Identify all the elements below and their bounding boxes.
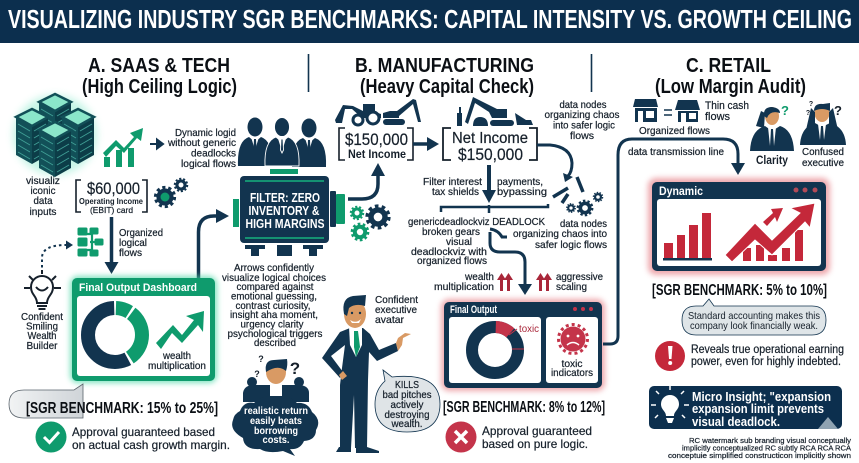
panel: dynamic dashboard	[648, 178, 830, 275]
text: arrows confidently: Arrows confidently	[234, 263, 315, 274]
label: organized flows: Organized flows	[639, 126, 710, 137]
card: net income left	[339, 128, 413, 161]
callout: kills bad pitches	[375, 370, 440, 432]
text: generic deadlock: deadlockviz with	[411, 247, 487, 258]
arrow: filter down to deadlock	[441, 165, 548, 213]
label: data inputs: inputs	[30, 207, 56, 218]
text: dynamic logic	[167, 128, 236, 170]
card: net income left: $150,000	[345, 130, 408, 149]
illustration: confused executive with cloud: ?	[258, 354, 264, 364]
panel: final output dashboard	[70, 276, 217, 383]
panel: filter machine	[233, 176, 345, 256]
panel: final output manufacturing: indicators	[551, 368, 593, 379]
text: organized logical flows: Organized	[119, 228, 163, 239]
illustration: confused executive with cloud: realistic return	[244, 406, 308, 417]
text: generic deadlock: genericdeadlockviz DEADLOCK	[408, 217, 545, 228]
icon: wealth arrow	[156, 311, 204, 349]
text: thin cash flows: flows	[705, 111, 730, 123]
text: filter interest: Filter interest	[423, 177, 482, 188]
callout: standard accounting	[682, 299, 826, 335]
label: wealth builder	[21, 312, 63, 352]
arrow: dotted idea path	[42, 240, 73, 273]
heading: section C	[655, 55, 806, 98]
card: operating income: Operating Income	[79, 196, 143, 206]
callout: standard accounting: Standard accounting makes this	[688, 311, 820, 322]
text: watermark note: conceptuie simplified constructicon implicitly shown	[668, 451, 851, 460]
panel: filter machine: INVENTORY &	[248, 203, 320, 218]
text: arrows confidently: emotional guessing,	[231, 292, 317, 302]
label: wealth multiplication	[148, 351, 206, 372]
title banner	[0, 0, 859, 43]
text: data nodes top: flows	[570, 131, 594, 142]
callout: kills bad pitches: actively	[390, 400, 424, 411]
chart: red bars	[663, 213, 712, 260]
panel: dynamic dashboard: Dynamic	[659, 184, 703, 198]
card: net income right: $150,000	[458, 145, 523, 164]
text: arrows confidently	[222, 263, 326, 349]
panel: final output manufacturing: toxic	[562, 359, 582, 370]
label: executive avatar: executive	[375, 305, 417, 316]
label: data inputs: data	[34, 196, 53, 207]
arrow: chart to text	[150, 140, 163, 148]
text: arrows confidently: visualize logical choices	[222, 273, 326, 284]
arrow: net income to gears	[537, 145, 573, 182]
icon: executive group	[238, 118, 326, 167]
label: executive avatar: avatar	[375, 315, 405, 326]
icon: backhoe and excavator	[335, 99, 421, 125]
text: approval A	[72, 425, 230, 452]
text: arrows confidently: urgency clarity	[240, 320, 304, 330]
label: wealth builder: Smiling	[26, 322, 58, 332]
text: watermark note: RC watermark sub branding visual conceptually	[689, 436, 851, 445]
illustration: confused executive with cloud: costs.	[262, 435, 290, 446]
icon: green check badge	[36, 422, 66, 452]
labels: clarity and confused executive	[756, 147, 844, 169]
icon: network flow	[78, 228, 103, 256]
text: generic deadlock: visual	[446, 237, 472, 248]
illustration: confused executive with cloud	[232, 354, 318, 456]
arrow: filter to net income	[348, 163, 385, 199]
text: data nodes top: data nodes	[560, 100, 606, 111]
text: filter interest	[423, 177, 547, 198]
label: data inputs: visualiz	[26, 176, 60, 187]
heading: section B: (Heavy Capital Check)	[360, 76, 534, 98]
text: filter interest: payments,	[497, 177, 543, 188]
icon: toxic face	[558, 324, 588, 354]
text and icon: wealth multiplication arrows: scaling	[556, 282, 587, 293]
text: dynamic logic: logical flows	[181, 159, 236, 170]
label: wealth builder: Confident	[21, 312, 63, 323]
heading: section A	[82, 55, 237, 98]
callout: kills bad pitches: wealth.	[391, 419, 422, 430]
arrow: net income transfer	[413, 137, 439, 151]
text: data nodes top	[544, 100, 620, 142]
text: reveals true earning	[691, 344, 844, 368]
text: reveals true earning: Reveals true operational earning	[691, 344, 844, 356]
text and icon: wealth multiplication arrows: wealth	[464, 272, 494, 283]
panel: final output manufacturing: toxic	[519, 324, 539, 335]
text: generic deadlock: broken gears	[422, 227, 480, 238]
text and icon: wealth multiplication arrows	[434, 272, 603, 293]
icon: clarity executive: ?	[781, 103, 789, 118]
text: thin cash flows: Thin cash	[705, 100, 749, 112]
label: executive avatar: Confident	[375, 295, 418, 306]
card: net income right	[443, 128, 537, 164]
label: wealth multiplication: multiplication	[148, 361, 206, 372]
label: wealth builder: Builder	[26, 341, 58, 352]
icon: confused executive: ?	[809, 101, 813, 108]
arrow: data transmission line	[603, 139, 745, 344]
icon: confused executive: ?	[806, 110, 810, 117]
icon: green growth chart	[103, 128, 143, 167]
panel: filter machine: FILTER: ZERO	[250, 190, 320, 205]
card: net income right: Net Income	[452, 130, 528, 147]
icon: confused executive	[800, 101, 846, 145]
icon: gears with check	[156, 179, 187, 206]
arrow: filter feedback pipe	[198, 209, 229, 280]
text: generic deadlock	[408, 217, 545, 267]
icon: excavator and stacked assets	[457, 97, 533, 126]
label: data inputs	[26, 176, 60, 218]
callout: SGR benchmark A	[9, 384, 218, 418]
text: watermark note: implicitly conceptualized RC subtly RCA RCA RCA	[682, 444, 851, 452]
text: arrows confidently: psychological triggers	[228, 329, 322, 340]
icon: filter gears	[351, 206, 389, 240]
text: data nodes bottom	[513, 219, 607, 251]
label: wealth multiplication: wealth	[162, 351, 191, 362]
text: approval B: based on pure logic.	[482, 437, 588, 451]
text: organized logical flows: flows	[119, 248, 142, 259]
text: watermark note	[668, 436, 851, 460]
text: approval B	[482, 424, 592, 451]
label: executive avatar	[375, 295, 418, 326]
labels: clarity and confused executive: Clarity	[756, 153, 788, 167]
callout: kills bad pitches: KILLS	[395, 380, 419, 391]
panel: final output manufacturing: Final Output	[450, 304, 497, 316]
labels: clarity and confused executive: Confused	[802, 147, 844, 158]
text: dynamic logic: deadlocks	[191, 148, 236, 160]
text: arrows confidently: insight aha moment,	[230, 310, 318, 321]
card: operating income: $60,000	[87, 179, 140, 198]
panel: micro insight: visual deadlock.	[692, 414, 780, 429]
text: dynamic logic: Dynamic logid	[175, 128, 236, 139]
icon: retail stores	[633, 99, 700, 122]
heading: section B: B. MANUFACTURING	[355, 55, 534, 77]
icon: confused executive: ?	[834, 103, 842, 118]
icon: insight bulb	[651, 386, 689, 423]
text and icon: wealth multiplication arrows: aggressive	[556, 272, 603, 283]
text: approval A: Approval guaranteed based	[72, 425, 215, 439]
illustration: confident executive avatar	[322, 295, 411, 453]
text: arrows confidently: compared against	[236, 282, 314, 293]
text: reveals true earning: power, even for highly indebted.	[691, 356, 841, 368]
heading: section A: (High Ceiling Logic)	[82, 76, 237, 98]
text: arrows confidently: described	[254, 338, 296, 349]
icon: clarity executive	[750, 103, 794, 151]
text and icon: wealth multiplication arrows: multiplication	[434, 282, 494, 293]
illustration: confused executive with cloud: ?	[254, 369, 260, 379]
icon: red x badge	[446, 422, 476, 452]
text: generic deadlock: organized flows	[417, 256, 487, 267]
callout: kills bad pitches: bad pitches	[382, 390, 432, 401]
icon: red alert badge	[655, 341, 685, 371]
heading: section B	[355, 55, 534, 98]
text: thin cash flows	[705, 100, 749, 123]
icon: server data stacks	[13, 94, 97, 177]
callout: kills bad pitches: destroying	[384, 410, 430, 421]
text: SGR benchmark B: [SGR BENCHMARK: 8% to 12%]	[443, 399, 605, 416]
label: data inputs: iconic	[30, 186, 56, 197]
illustration: confused executive with cloud: ?	[290, 359, 300, 378]
illustration: confused executive with cloud: borrowing	[254, 426, 298, 437]
label: data transmission line: data transmission line	[628, 147, 724, 158]
icon: lightbulb	[24, 270, 61, 309]
icon: broken gears	[553, 177, 602, 215]
arrow: deadlock to final output	[490, 229, 532, 295]
text: data nodes top: into safer logic	[553, 120, 615, 132]
chart: donut	[88, 308, 142, 362]
chart: toxic donut	[472, 327, 524, 373]
panel: filter machine: HIGH MARGINS	[246, 216, 325, 231]
heading: section A: A. SAAS & TECH	[88, 55, 230, 77]
text: organized logical flows: logical	[119, 238, 147, 249]
callout: SGR benchmark A: [SGR BENCHMARK: 15% to 25%]	[26, 400, 218, 417]
illustration: confused executive with cloud: easily beats	[250, 416, 302, 427]
panel: micro insight	[649, 386, 842, 429]
panel: final output dashboard: Final Output Dashboard	[79, 282, 197, 294]
label: wealth builder: Wealth	[28, 331, 57, 342]
panel: final output manufacturing	[441, 299, 605, 391]
text: arrows confidently: contrast curiosity,	[236, 301, 310, 312]
text: approval B: Approval guaranteed	[482, 424, 592, 438]
text: data nodes bottom: safer logic flows	[535, 240, 607, 251]
text: filter interest: tax shields	[432, 187, 479, 198]
card: net income left: Net Income	[348, 147, 406, 161]
labels: clarity and confused executive: executive	[802, 158, 844, 169]
heading: section C: C. RETAIL	[686, 55, 771, 77]
card: operating income: (EBIT) card	[90, 205, 133, 215]
arrow: income to dashboard	[104, 217, 118, 274]
text: organized logical flows	[119, 228, 163, 259]
callout: standard accounting: company look financially weak.	[690, 321, 818, 332]
text: data nodes bottom: data nodes	[560, 219, 607, 230]
text: approval A: on actual cash growth margin.	[72, 438, 230, 452]
text: data nodes bottom: organizing chaos into	[513, 229, 607, 240]
chart: red growth arrow	[725, 203, 815, 262]
text: data nodes top: organizing chaos	[544, 110, 620, 121]
text: dynamic logic: without generic	[167, 138, 236, 149]
text: filter interest: bypassing	[497, 187, 547, 198]
panel: micro insight: expansion limit prevents	[692, 401, 824, 416]
heading: section C: (Low Margin Audit)	[655, 76, 806, 98]
panel: micro insight: Micro Insight; "expansion	[692, 389, 831, 404]
card: operating income	[76, 179, 147, 215]
